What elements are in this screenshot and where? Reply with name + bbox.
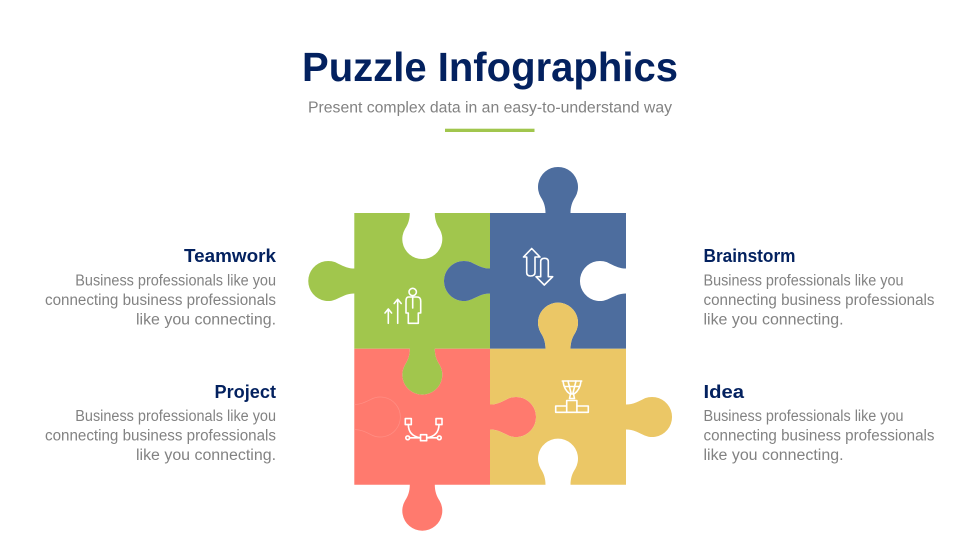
text block: Project: Project [214, 381, 276, 402]
text block: Teamwork: Teamwork [184, 245, 277, 266]
icon: bezier curve tool [405, 419, 442, 441]
title underline [445, 129, 534, 132]
text block: Brainstorm: Business professionals like you [704, 272, 904, 290]
icon: trophy on podium [556, 381, 588, 412]
puzzle piece: blue [444, 167, 626, 349]
text block: Project: like you connecting. [136, 447, 276, 464]
text block: Project: Business professionals like you [75, 408, 276, 425]
text block: Idea [704, 381, 935, 464]
text block: Project: connecting business professionals [45, 428, 276, 444]
text block: Brainstorm [704, 245, 935, 328]
puzzle piece: red [354, 349, 536, 531]
subtitle: Present complex data in an easy-to-understand way [308, 100, 672, 116]
text block: Brainstorm: connecting business professionals [704, 292, 935, 309]
icon: person with rising arrows [385, 288, 421, 323]
text block: Brainstorm: Brainstorm [704, 245, 796, 266]
text block: Idea: Business professionals like you [704, 408, 904, 425]
text block: Teamwork [45, 245, 277, 328]
puzzle piece: green [308, 213, 490, 395]
text block: Teamwork: like you connecting. [136, 311, 276, 328]
text block: Idea: like you connecting. [704, 447, 844, 464]
faint socket outline in red piece [354, 397, 400, 437]
text block: Brainstorm: like you connecting. [704, 311, 844, 328]
text block: Project [45, 381, 276, 464]
text block: Teamwork: connecting business professionals [45, 292, 276, 309]
text block: Idea: connecting business professionals [704, 428, 935, 444]
text block: Idea: Idea [704, 381, 745, 402]
text block: Teamwork: Business professionals like you [75, 272, 276, 290]
title: Puzzle Infographics [302, 44, 678, 90]
puzzle piece: yellow [490, 303, 672, 485]
icon: up and down arrows [524, 248, 553, 285]
